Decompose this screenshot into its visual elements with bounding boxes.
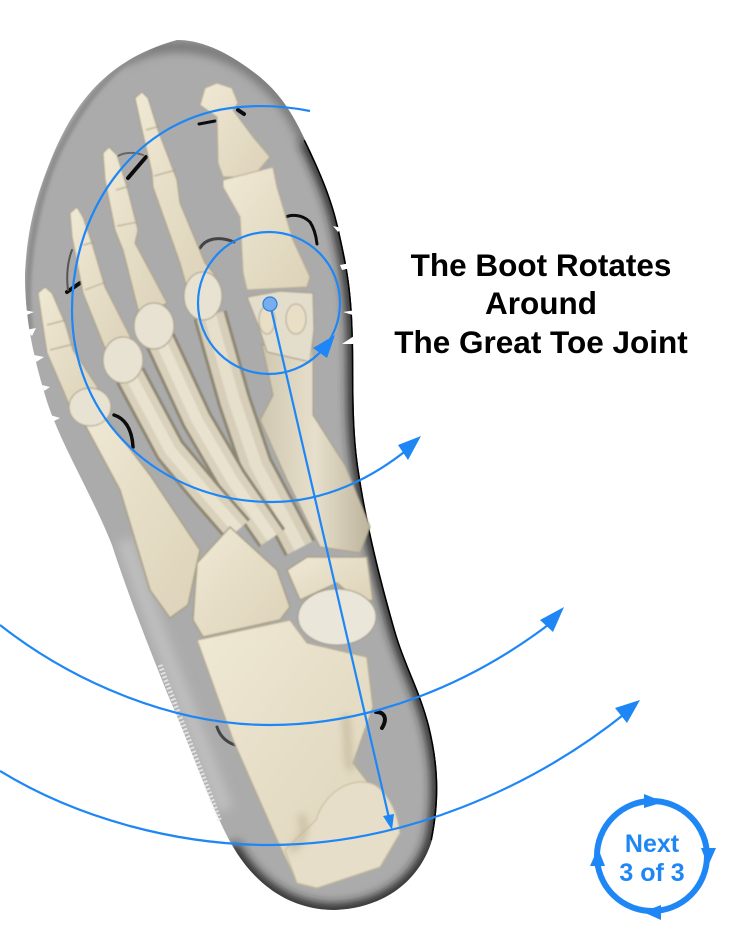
bone: cuneiform: [287, 557, 373, 603]
black eyelet hooks: [67, 110, 385, 745]
button: next 3 of 3: [590, 794, 716, 920]
bone: great toe proximal phalanx: [223, 167, 310, 290]
bone: great toe distal phalanx: [200, 83, 270, 177]
bone: fifth metatarsal: [78, 412, 200, 618]
bones: metatarsal heads: [69, 272, 222, 426]
panel: boot sole: [24, 40, 437, 910]
title: The Great Toe Joint: [394, 324, 688, 360]
arrow: midfoot rotation arc: [0, 607, 564, 725]
white lettering strip on sole: [160, 665, 220, 822]
bone: talus head: [298, 589, 376, 645]
bones: lesser toes: [38, 92, 215, 407]
bone shading: [290, 715, 352, 850]
arrow: outer spiral around toes: [72, 106, 421, 502]
arrow: inner rotation circle: [198, 232, 340, 374]
joint lines on lesser toes: [47, 126, 176, 350]
button: next 3 of 3: Next: [625, 830, 680, 858]
bones: lesser metatarsals: [130, 315, 300, 548]
arrow: heel rotation arc: [0, 700, 640, 845]
illustration: foot skeleton: [38, 83, 400, 888]
arrow: axis line from toe joint to heel: [270, 304, 394, 830]
title: Around: [485, 285, 597, 321]
title: The Boot Rotates: [411, 247, 671, 283]
sole edge notches: [24, 226, 356, 422]
icon: great toe joint pivot: [263, 297, 277, 311]
bone: heel tuberosity: [285, 782, 400, 888]
bones: sesamoids: [259, 304, 306, 334]
bone: great toe metatarsal head: [247, 291, 314, 362]
bone: calcaneus: [197, 620, 400, 888]
button: next 3 of 3: 3 of 3: [619, 859, 685, 887]
bone: great toe metatarsal shaft: [260, 345, 370, 553]
bone: cuboid: [193, 527, 290, 637]
